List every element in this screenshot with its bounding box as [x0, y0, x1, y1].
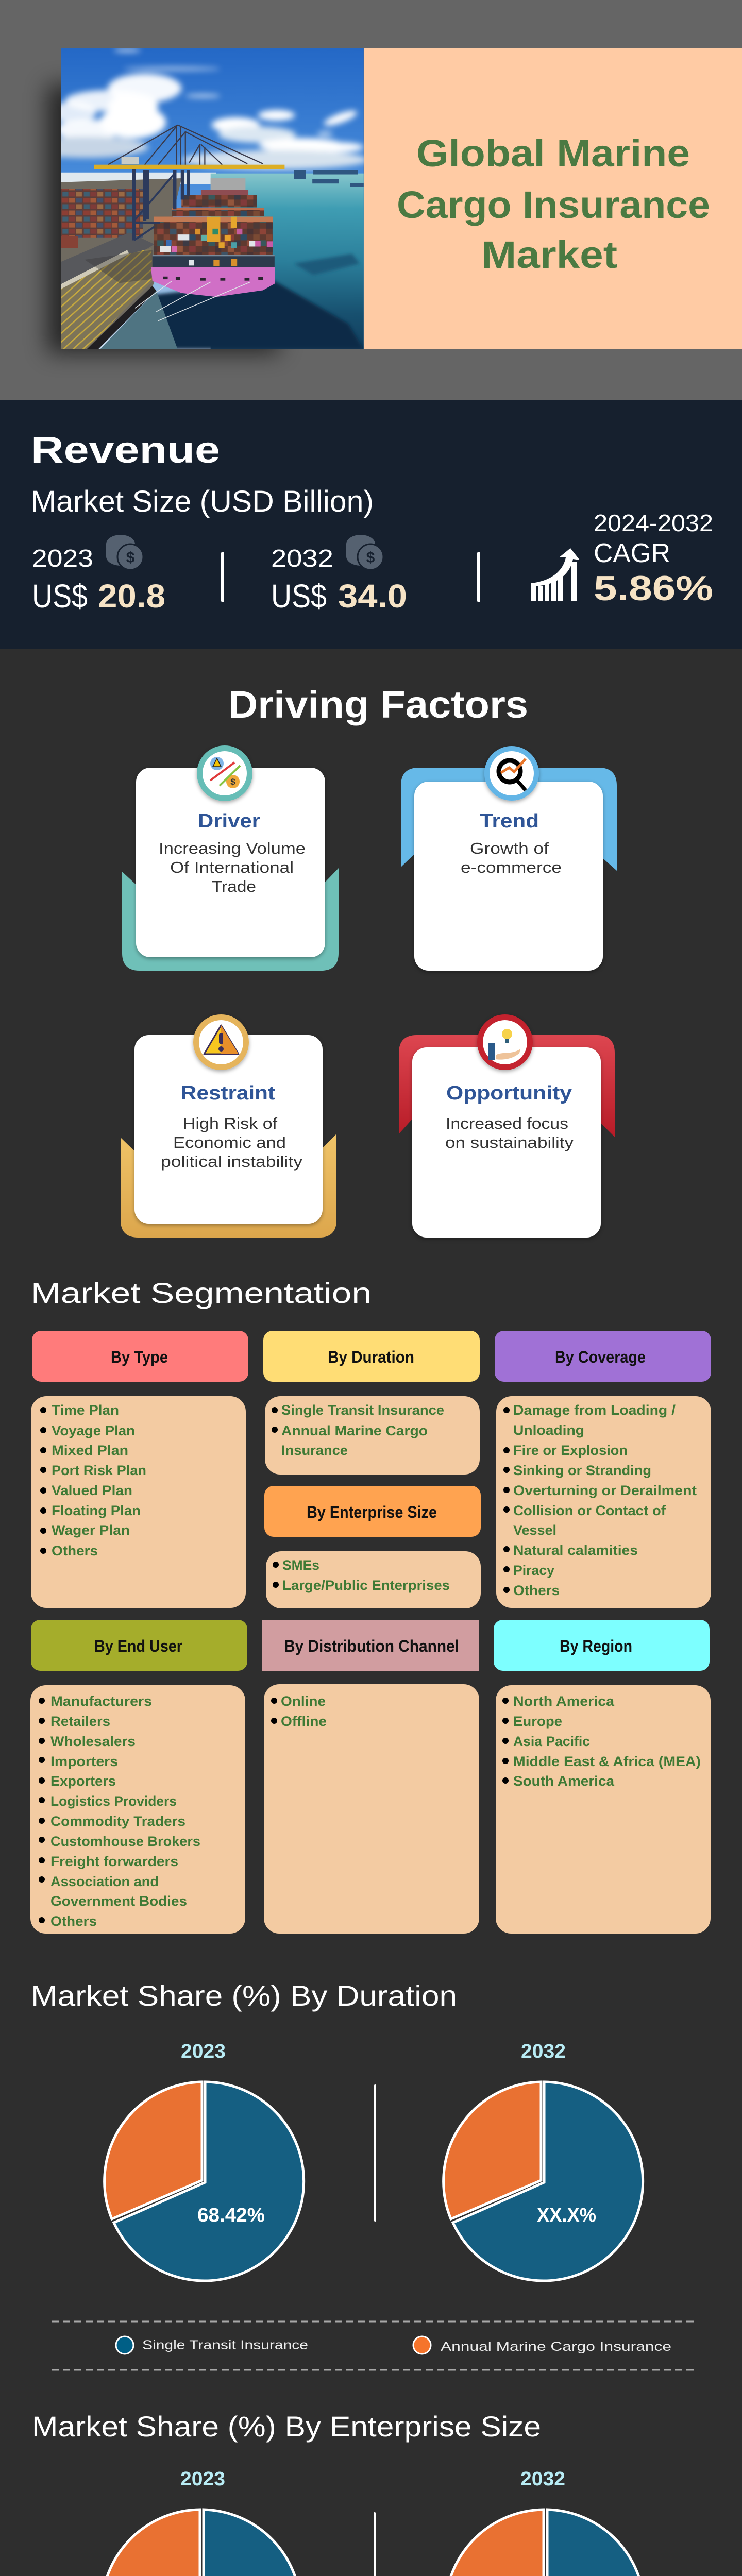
icon: idea in hand	[477, 1014, 533, 1070]
text: driver description: Trade	[212, 877, 256, 895]
text: restraint description	[161, 1114, 303, 1171]
label: 2023: 2023	[181, 2041, 226, 2062]
list: coverage: Unloading	[513, 1422, 584, 1438]
list: region: South America	[513, 1773, 615, 1789]
panel: by end user: By End User	[94, 1637, 182, 1655]
list: end user: Others	[50, 1913, 97, 1929]
panel: by end user	[30, 1620, 247, 1934]
list: enterprise size	[273, 1557, 450, 1593]
list: region: Asia Pacific	[513, 1734, 590, 1749]
list: coverage: Sinking or Stranding	[513, 1463, 651, 1478]
pie chart: duration 2032: XX.X%	[537, 2205, 596, 2226]
list: coverage: Collision or Contact of	[513, 1503, 666, 1518]
list: distribution channel: Offline	[281, 1714, 327, 1729]
stat: 2032	[271, 545, 407, 615]
list: end user: Retailers	[50, 1714, 110, 1729]
list: region: Middle East & Africa (MEA)	[513, 1754, 701, 1769]
list: end user: Freight forwarders	[50, 1854, 178, 1869]
text: driver description: Increasing Volume	[159, 839, 306, 857]
icon: driver gears: $	[230, 777, 235, 787]
card: driver	[122, 745, 339, 971]
list: end user: Commodity Traders	[50, 1814, 185, 1829]
list: distribution channel	[271, 1693, 327, 1729]
heading: by enterprise size: Market Share (%) By Enterprise Size	[32, 2410, 541, 2443]
stat: 2023: US$	[32, 578, 88, 615]
heading: by duration: Market Share (%) By Duration	[31, 1979, 457, 2012]
list: region: Europe	[513, 1714, 562, 1729]
list: coverage: Piracy	[513, 1563, 554, 1578]
pie chart: duration 2032	[444, 2082, 643, 2281]
list: type: Voyage Plan	[52, 1423, 135, 1438]
list: coverage: Natural calamities	[513, 1543, 638, 1558]
icon: coins 2023	[106, 535, 143, 570]
label: 2032: 2032	[521, 2041, 566, 2062]
icon: coins 2032: $	[366, 549, 375, 566]
legend: duration: Annual Marine Cargo Insurance	[441, 2340, 671, 2354]
stat: CAGR: 5.86%	[594, 569, 713, 608]
panel: by type: By Type	[111, 1348, 168, 1366]
list: end user: Association and	[50, 1874, 159, 1889]
pie chart: enterprise size 2032	[445, 2510, 644, 2576]
hero banner	[0, 0, 742, 400]
stat: CAGR	[594, 510, 713, 608]
heading: revenue: Revenue	[31, 430, 220, 471]
panel: by type	[31, 1331, 248, 1608]
stat: 2032: 2032	[271, 545, 333, 572]
list: enterprise size: Large/Public Enterprises	[282, 1578, 450, 1593]
icon: coins 2023: $	[126, 549, 135, 566]
list: end user	[39, 1693, 200, 1929]
title: Cargo Insurance	[397, 183, 710, 226]
text: restraint description: High Risk of	[183, 1114, 277, 1132]
heading: trend: Trend	[480, 810, 539, 832]
divider	[477, 552, 480, 602]
icon: trend magnifier	[484, 746, 539, 801]
heading: opportunity: Opportunity	[446, 1082, 572, 1104]
text: restraint description: Economic and	[173, 1133, 286, 1151]
section: market share by enterprise size	[32, 2410, 695, 2576]
section: driving factors	[121, 683, 617, 1238]
list: type: Time Plan	[52, 1402, 119, 1418]
stat: 2023	[32, 545, 165, 615]
list: coverage: Fire or Explosion	[513, 1443, 628, 1458]
list: region: North America	[513, 1693, 615, 1709]
list: coverage: Vessel	[513, 1522, 556, 1538]
text: driver description	[159, 839, 306, 895]
list: enterprise size: SMEs	[282, 1557, 319, 1573]
text: opportunity description	[445, 1114, 574, 1151]
text: driver description: Of International	[170, 858, 294, 876]
heading: driver: Driver	[198, 810, 260, 832]
text: restraint description: political instability	[161, 1153, 303, 1171]
panel: by distribution channel: By Distribution Channel	[284, 1637, 459, 1655]
heading: market segmentation: Market Segmentation	[31, 1277, 372, 1309]
list: duration: Annual Marine Cargo	[281, 1423, 428, 1438]
legend: duration	[116, 2336, 671, 2354]
title: Global Marine	[416, 132, 690, 175]
list: end user: Manufacturers	[50, 1693, 152, 1709]
panel: by coverage	[495, 1331, 711, 1608]
list: type: Floating Plan	[52, 1503, 141, 1518]
text: trend description	[461, 839, 562, 876]
section: market segmentation	[30, 1277, 711, 1934]
divider	[221, 552, 224, 602]
list: end user: Government Bodies	[50, 1893, 187, 1909]
list: type: Wager Plan	[52, 1522, 130, 1538]
list: region	[502, 1693, 701, 1789]
icon: growth chart	[531, 548, 580, 601]
list: type	[40, 1402, 146, 1558]
list: end user: Importers	[50, 1754, 118, 1769]
card: restraint	[121, 1014, 336, 1238]
pie chart: duration 2023	[105, 2082, 304, 2281]
stat: 2023: 20.8	[98, 578, 165, 615]
panel: by coverage: By Coverage	[555, 1348, 646, 1366]
list: end user: Logistics Providers	[50, 1793, 177, 1809]
panel: by duration	[263, 1331, 480, 1475]
stat: 2032: 34.0	[338, 578, 407, 615]
list: coverage: Overturning or Derailment	[513, 1483, 697, 1498]
list: coverage: Damage from Loading /	[513, 1402, 676, 1418]
panel: by region: By Region	[560, 1637, 632, 1655]
text: trend description: Growth of	[470, 839, 549, 857]
stat: 2023: 2023	[32, 545, 93, 572]
card: trend	[401, 746, 617, 971]
panel: revenue	[0, 400, 742, 649]
text: trend description: e-commerce	[461, 858, 562, 876]
list: duration: Insurance	[281, 1443, 348, 1458]
icon: warning	[193, 1014, 249, 1070]
list: type: Valued Plan	[52, 1483, 132, 1498]
panel: by duration: By Duration	[328, 1348, 414, 1366]
stat: 2032: US$	[271, 578, 327, 615]
text: opportunity description: on sustainability	[445, 1133, 574, 1151]
list: end user: Wholesalers	[50, 1734, 136, 1749]
legend: duration: Single Transit Insurance	[142, 2338, 308, 2352]
list: end user: Customhouse Brokers	[50, 1834, 200, 1849]
heading: restraint: Restraint	[181, 1082, 275, 1104]
stat: CAGR: CAGR	[594, 538, 670, 568]
title: Market	[481, 233, 617, 276]
list: type: Mixed Plan	[52, 1443, 128, 1458]
panel: by enterprise size	[264, 1486, 481, 1608]
text: market size label: Market Size (USD Billion)	[31, 485, 374, 518]
list: type: Others	[52, 1543, 98, 1558]
list: coverage: Others	[513, 1583, 560, 1598]
panel: by region	[494, 1620, 711, 1934]
pie chart: duration 2023: 68.42%	[197, 2205, 265, 2226]
list: duration: Single Transit Insurance	[281, 1402, 444, 1418]
pie chart: enterprise size 2023	[102, 2510, 300, 2576]
list: distribution channel: Online	[281, 1693, 326, 1709]
stat: CAGR: 2024-2032	[594, 510, 713, 536]
list: duration	[272, 1402, 444, 1458]
section: market share by duration	[31, 1979, 695, 2370]
list: end user: Exporters	[50, 1773, 116, 1789]
label: 2023: 2023	[180, 2468, 225, 2490]
icon: driver gears	[197, 745, 252, 801]
photo: container ship at port	[61, 48, 364, 349]
panel: by enterprise size: By Enterprise Size	[307, 1503, 437, 1521]
list: coverage	[503, 1402, 697, 1598]
list: type: Port Risk Plan	[52, 1463, 146, 1478]
text: opportunity description: Increased focus	[446, 1114, 568, 1132]
label: 2032: 2032	[520, 2468, 565, 2490]
heading: driving factors: Driving Factors	[228, 683, 528, 726]
card: opportunity	[399, 1014, 615, 1238]
panel: by distribution channel	[262, 1620, 479, 1934]
icon: coins 2032	[346, 535, 383, 570]
title panel	[364, 48, 742, 349]
title	[397, 132, 710, 276]
